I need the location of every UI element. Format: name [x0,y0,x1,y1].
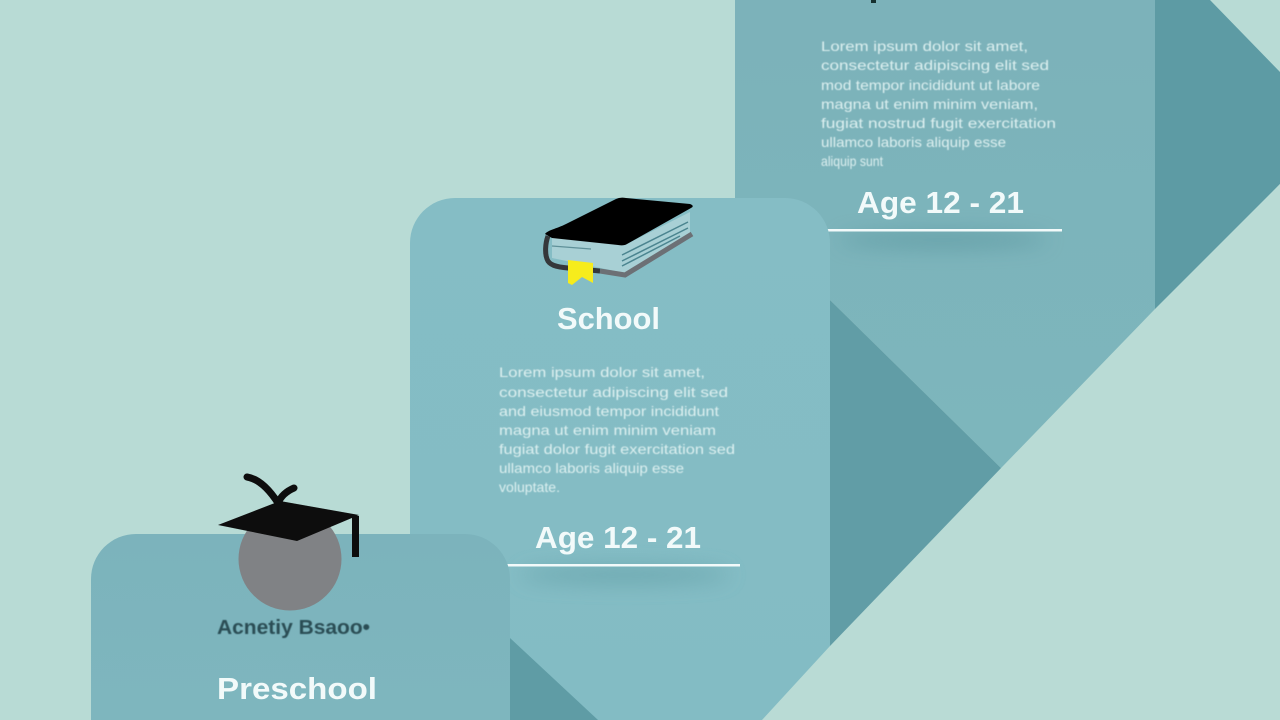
icon: apple with graduation cap [218,477,359,610]
text block: school description: and eiusmod tempor incididunt [499,403,719,419]
text block: university description: consectetur adipiscing elit sed [821,57,1049,73]
text block: university description: ullamco laboris aliquip esse [821,134,1006,150]
text block: school description [499,364,735,495]
icon: yellow bookmark [568,260,593,285]
age label: school: Age 12 - 21 [535,520,701,555]
text block: university description: Lorem ipsum dolor sit amet, [821,38,1028,54]
text block: school description: magna ut enim minim veniam [499,422,716,438]
text block: school description: ullamco laboris aliquip esse [499,460,684,476]
panel: dark fold below top card [830,300,1003,650]
text block: school description: consectetur adipiscing elit sed [499,384,728,400]
age underline [825,229,1062,232]
icon: book [545,198,693,285]
panel: light diagonal foreground [762,184,1280,720]
icon: cap tassel fragment [871,0,876,3]
caption: preschool label: Acnetiy Bsaoo• [217,617,370,639]
text block: school description: fugiat dolor fugit exercitation sed [499,441,735,457]
heading: School: School [557,301,660,336]
age underline [507,564,740,566]
text block: university description: aliquip sunt [821,153,883,169]
text block: school description: Lorem ipsum dolor sit amet, [499,364,705,380]
text block: university description: magna ut enim minim veniam, [821,96,1038,112]
panel: school card [410,198,830,720]
panel: dark fold right of top card [1155,0,1280,313]
panel: university card [735,0,1155,470]
shadow under age line [838,232,1048,248]
text block: university description: mod tempor incididunt ut labore [821,77,1040,93]
text block: university description: fugiat nostrud fugit exercitation [821,115,1056,131]
shadow under age line [520,567,730,583]
age label: university: Age 12 - 21 [857,185,1024,220]
panel: preschool card [91,477,510,720]
panel: dark fold right of preschool card [510,638,598,720]
text block: school description: voluptate. [499,479,560,495]
text block: university description [821,38,1056,169]
heading: Preschool: Preschool [217,671,377,706]
